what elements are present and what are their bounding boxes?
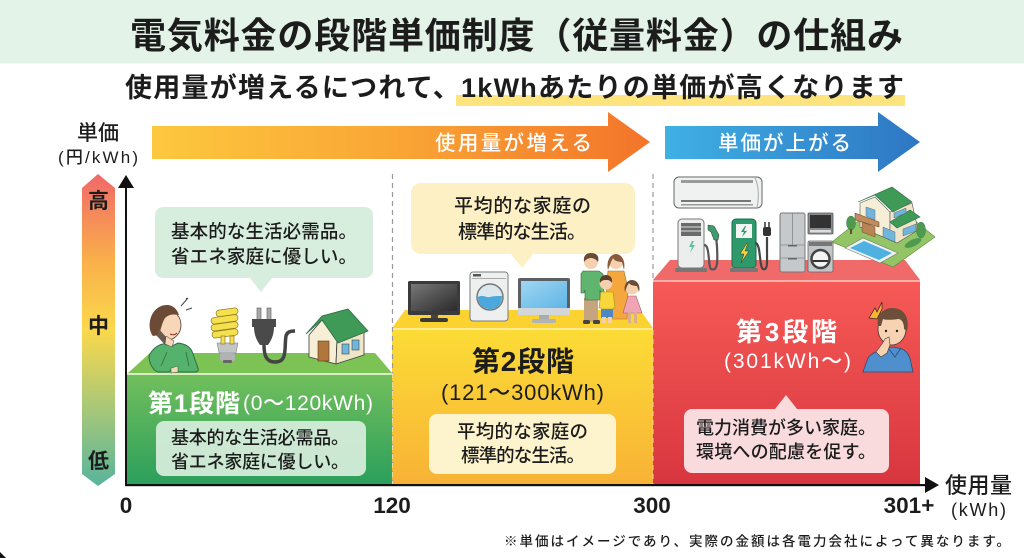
x axis tick labels: 0 bbox=[120, 493, 132, 518]
speech bubble: tier 2 bbox=[411, 183, 635, 268]
icon: air conditioner bbox=[674, 177, 762, 208]
price level gradient arrow: 高 bbox=[88, 190, 109, 213]
tier 3 block bbox=[653, 260, 920, 485]
y axis label: 単価 bbox=[77, 122, 119, 145]
x axis bbox=[125, 477, 939, 493]
tier 1 description: 省エネ家庭に優しい。 bbox=[171, 452, 349, 472]
price level gradient arrow bbox=[82, 174, 115, 486]
tier 3 heading: (301kWh〜) bbox=[724, 350, 851, 373]
tier 3 heading bbox=[724, 317, 851, 373]
icon: light bulb bbox=[211, 307, 238, 363]
arrow: usage increases bbox=[152, 112, 650, 172]
tier 3 description: 環境への配慮を促す。 bbox=[696, 442, 876, 462]
tier 1 heading: 第1段階 bbox=[148, 390, 240, 418]
tier 1 block bbox=[127, 353, 392, 485]
tier 2 description bbox=[429, 414, 616, 474]
tier 2 heading: (121〜300kWh) bbox=[441, 380, 604, 405]
dashed dividers bbox=[392, 174, 653, 485]
icon: fuel style pump bbox=[675, 219, 719, 272]
icon: drum washer bbox=[808, 241, 833, 272]
y axis bbox=[118, 175, 134, 486]
speech bubble: tier 1: 基本的な生活必需品。 bbox=[171, 221, 357, 242]
x axis tick labels: 300 bbox=[633, 493, 671, 518]
x axis tick labels bbox=[120, 493, 934, 518]
arrow: usage increases: 使用量が増える bbox=[435, 132, 592, 155]
icon: microwave bbox=[808, 213, 833, 234]
y axis label: (円/kWh) bbox=[58, 148, 138, 167]
tier 1 heading: (0〜120kWh) bbox=[243, 392, 373, 415]
footnote: ※単価はイメージであり、実際の金額は各電力会社によって異なります。 bbox=[504, 533, 1010, 549]
arrow: unit price rises bbox=[665, 112, 920, 172]
price level gradient arrow: 中 bbox=[88, 315, 109, 338]
arrow: unit price rises: 単価が上がる bbox=[718, 132, 851, 155]
y axis label bbox=[58, 122, 138, 167]
title banner bbox=[0, 0, 1024, 64]
x axis label: 使用量 bbox=[945, 473, 1012, 498]
tier 2 heading bbox=[441, 346, 604, 405]
icon: small house bbox=[306, 309, 368, 364]
icon: family bbox=[581, 253, 642, 324]
tier 3 heading: 第3段階 bbox=[736, 317, 837, 347]
tier 1 heading bbox=[148, 390, 373, 418]
speech bubble: tier 1 bbox=[155, 207, 373, 292]
tier 2 description: 平均的な家庭の bbox=[457, 421, 588, 442]
tier 1 description bbox=[156, 421, 366, 476]
icon: refrigerator bbox=[780, 213, 805, 272]
tier 2 block bbox=[392, 310, 653, 485]
tier 3 description: 電力消費が多い家庭。 bbox=[696, 417, 876, 438]
speech bubble: tier 2: 標準的な生活。 bbox=[458, 221, 586, 243]
x axis tick labels: 120 bbox=[373, 493, 411, 518]
icon: worried man bbox=[863, 302, 913, 372]
x axis label: (kWh) bbox=[951, 500, 1006, 520]
icon: computer monitor bbox=[518, 278, 570, 323]
icon: thinking man bbox=[149, 298, 198, 373]
icon: television bbox=[408, 281, 460, 322]
icon: washing machine bbox=[470, 272, 508, 321]
subtitle with highlight: 使用量が増えるにつれて、1kWhあたりの単価が高くなります bbox=[125, 72, 904, 103]
icon: large house with pool bbox=[832, 187, 935, 267]
icon: power plug bbox=[252, 308, 295, 362]
x axis label bbox=[945, 473, 1012, 520]
tier 3 description bbox=[684, 395, 889, 473]
tier 2 description: 標準的な生活。 bbox=[461, 445, 585, 466]
speech bubble: tier 2: 平均的な家庭の bbox=[454, 195, 591, 217]
x axis tick labels: 301+ bbox=[884, 493, 934, 518]
icon: ev charger bbox=[730, 219, 771, 272]
tier 2 heading: 第2段階 bbox=[472, 346, 574, 377]
tier 1 description: 基本的な生活必需品。 bbox=[171, 428, 349, 448]
price level gradient arrow: 低 bbox=[88, 450, 109, 473]
title: 電気料金の段階単価制度（従量料金）の仕組み bbox=[130, 15, 903, 56]
speech bubble: tier 1: 省エネ家庭に優しい。 bbox=[171, 246, 357, 267]
